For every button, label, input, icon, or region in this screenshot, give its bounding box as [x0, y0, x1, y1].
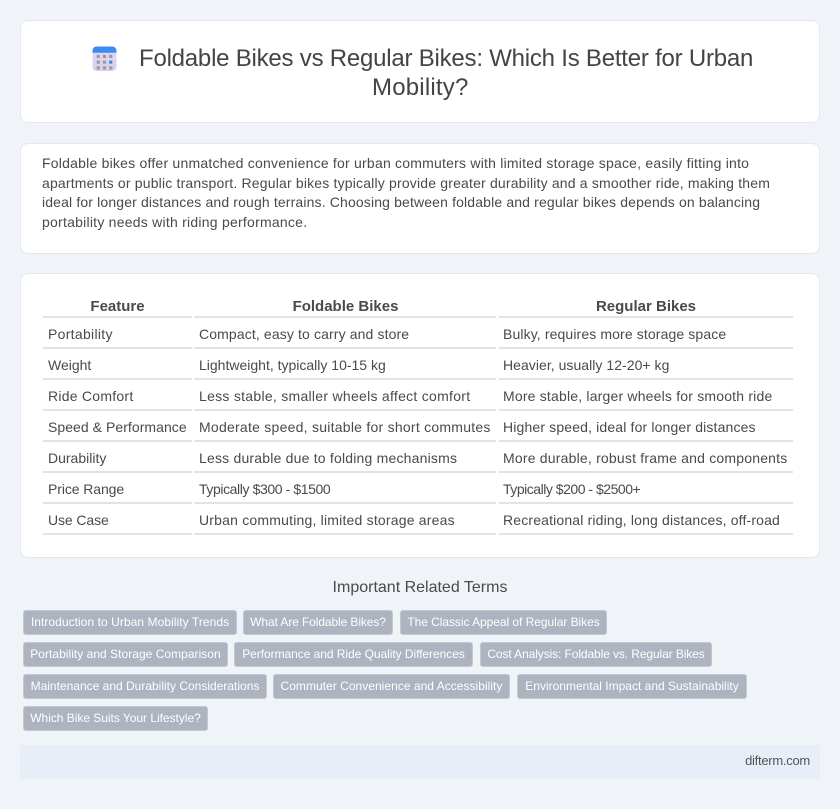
tag: Maintenance and Durability Considerations — [31, 679, 259, 693]
tag — [400, 610, 607, 635]
row: ride comfort: Ride Comfort — [48, 388, 133, 404]
tag — [23, 610, 237, 635]
row: use case: Urban commuting, limited storage areas — [199, 512, 455, 528]
tag — [517, 674, 747, 699]
tag — [243, 610, 393, 635]
icon: calendar — [92, 46, 116, 71]
related terms tags — [23, 610, 747, 731]
row: weight: Lightweight, typically 10-15 kg — [199, 357, 386, 373]
related terms heading: Important Related Terms — [333, 579, 507, 596]
row: price range — [43, 481, 793, 504]
title: Foldable Bikes vs Regular Bikes: Which Is Better for Urban — [139, 45, 753, 72]
table header row: Regular Bikes — [596, 298, 696, 315]
row: use case: Recreational riding, long distances, off-road — [503, 512, 780, 528]
intro paragraph: portability needs with riding performance. — [42, 214, 307, 230]
tag: The Classic Appeal of Regular Bikes — [407, 615, 600, 629]
tag: Introduction to Urban Mobility Trends — [31, 615, 229, 629]
tag — [480, 642, 712, 667]
row: durability — [43, 450, 793, 473]
row: price range: Typically $300 - $1500 — [199, 481, 330, 497]
row: portability: Bulky, requires more storage space — [503, 326, 726, 342]
tag — [23, 642, 228, 667]
title — [139, 45, 753, 101]
intro paragraph: Foldable bikes offer unmatched convenience for urban commuters with limited storage space, easily fitting into — [42, 155, 749, 171]
intro paragraph: ideal for longer distances and rough terrains. Choosing between foldable and regular bikes depends on balancing — [42, 194, 760, 210]
header panel — [20, 20, 820, 123]
row: ride comfort — [43, 388, 793, 411]
tag: Performance and Ride Quality Differences — [242, 647, 465, 661]
tag: Which Bike Suits Your Lifestyle? — [30, 711, 201, 725]
tag — [234, 642, 473, 667]
row: weight — [43, 357, 793, 380]
row: use case — [43, 512, 793, 535]
table header row: Foldable Bikes — [293, 298, 398, 315]
row: speed and performance: Speed & Performance — [48, 419, 187, 435]
tag — [23, 706, 208, 731]
tag: Portability and Storage Comparison — [30, 647, 221, 661]
tag: Commuter Convenience and Accessibility — [281, 679, 502, 693]
row: durability: More durable, robust frame and components — [503, 450, 787, 466]
comparison table panel — [20, 273, 820, 558]
tag: What Are Foldable Bikes? — [250, 615, 386, 629]
row: speed and performance: Moderate speed, suitable for short commutes — [199, 419, 491, 435]
footer bar — [20, 745, 820, 779]
row: durability: Less durable due to folding mechanisms — [199, 450, 457, 466]
intro paragraph: apartments or public transport. Regular bikes typically provide greater durability and a smoother ride, making them — [42, 174, 770, 190]
table header row: Feature — [90, 298, 145, 315]
row: speed and performance: Higher speed, ideal for longer distances — [503, 419, 756, 435]
intro paragraph — [42, 155, 770, 230]
tag: Cost Analysis: Foldable vs. Regular Bikes — [487, 647, 705, 661]
row: durability: Durability — [48, 450, 106, 466]
footer site name: difterm.com — [745, 753, 810, 768]
row: ride comfort: Less stable, smaller wheels affect comfort — [199, 388, 470, 404]
tag: Environmental Impact and Sustainability — [525, 679, 739, 693]
tag — [23, 674, 267, 699]
row: price range: Typically $200 - $2500+ — [503, 481, 640, 497]
comparison table — [43, 298, 793, 535]
title: Mobility? — [372, 74, 468, 101]
row: use case: Use Case — [48, 512, 109, 528]
table header row — [43, 298, 793, 318]
row: weight: Weight — [48, 357, 91, 373]
intro text panel — [20, 143, 820, 254]
row: weight: Heavier, usually 12-20+ kg — [503, 357, 669, 373]
row: price range: Price Range — [48, 481, 124, 497]
row: ride comfort: More stable, larger wheels for smooth ride — [503, 388, 772, 404]
row: portability — [43, 326, 793, 349]
row: portability: Compact, easy to carry and store — [199, 326, 409, 342]
row: speed and performance — [43, 419, 793, 442]
tag — [273, 674, 510, 699]
row: portability: Portability — [48, 326, 113, 342]
